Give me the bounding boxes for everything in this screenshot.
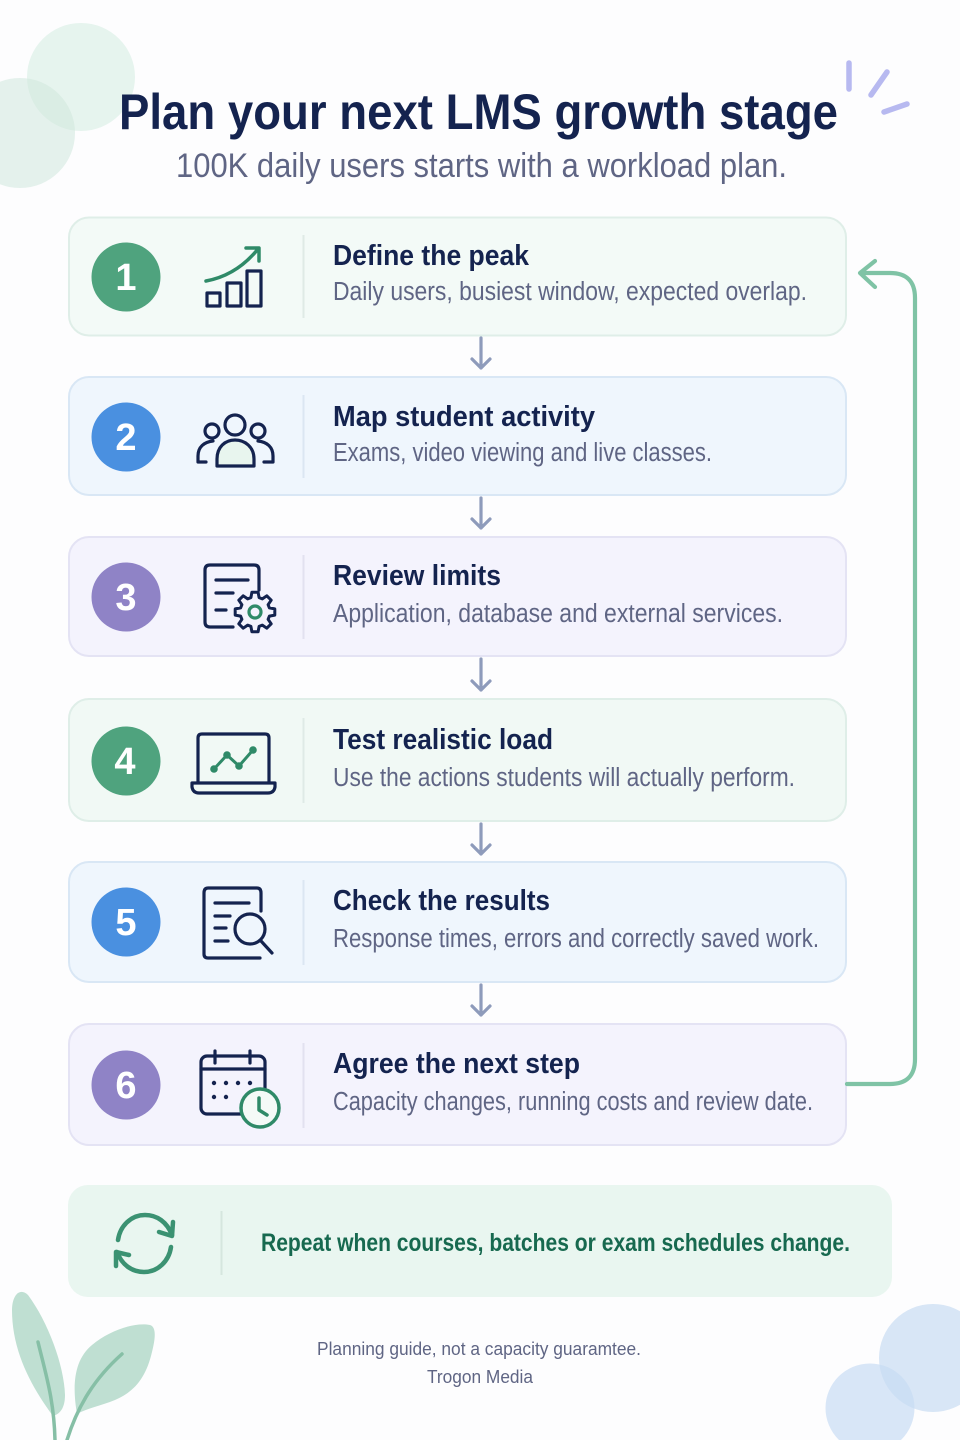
step 6 description: Capacity changes, running costs and review date. <box>333 1088 813 1116</box>
decorative leaves bottom left <box>12 1292 155 1440</box>
decorative sparks top right <box>849 63 907 112</box>
number badge 1: 1 <box>115 257 137 299</box>
panel: repeat banner <box>68 1185 892 1297</box>
panel: step 5 <box>69 862 846 982</box>
arrow 5 to 6 <box>472 985 490 1015</box>
number badge 3: 3 <box>115 577 137 619</box>
panel: step 4 <box>69 699 846 821</box>
footer credit: Trogon Media <box>427 1367 534 1387</box>
panel: step 2 <box>69 377 846 495</box>
panel: step 3 <box>69 537 846 656</box>
icon: calendar with clock <box>201 1051 279 1127</box>
arrow 3 to 4 <box>472 659 490 690</box>
step 1 heading: Define the peak <box>333 240 530 272</box>
arrow 2 to 3 <box>472 498 490 528</box>
panel: step 1 <box>69 218 846 336</box>
icon: document with magnifier <box>204 888 272 958</box>
subtitle: 100K daily users starts with a workload plan. <box>176 147 787 185</box>
number badge 5 <box>92 888 160 956</box>
loop arrow from step 6 back to step 1 <box>847 261 915 1084</box>
icon: refresh <box>116 1215 173 1272</box>
step 3 description: Application, database and external services. <box>333 600 783 628</box>
title: Plan your next LMS growth stage <box>119 84 838 140</box>
footer note: Planning guide, not a capacity guaramtee. <box>317 1339 641 1359</box>
arrow 1 to 2 <box>472 338 490 368</box>
panel: step 6 <box>69 1024 846 1145</box>
number badge 6 <box>92 1050 160 1120</box>
step 3 heading: Review limits <box>333 560 501 592</box>
arrow 4 to 5 <box>472 824 490 854</box>
number badge 6: 6 <box>115 1065 137 1107</box>
step 2 heading: Map student activity <box>333 401 595 433</box>
number badge 5: 5 <box>115 902 137 944</box>
icon: laptop with line chart <box>192 734 275 793</box>
step 4 description: Use the actions students will actually perform. <box>333 764 795 792</box>
number badge 3 <box>92 562 160 632</box>
number badge 2: 2 <box>115 417 137 459</box>
step 2 description: Exams, video viewing and live classes. <box>333 439 712 467</box>
repeat message: Repeat when courses, batches or exam schedules change. <box>261 1229 850 1257</box>
number badge 4: 4 <box>114 741 136 783</box>
icon: growth chart <box>206 248 261 306</box>
step 4 heading: Test realistic load <box>333 724 553 756</box>
step 1 description: Daily users, busiest window, expected overlap. <box>333 278 807 306</box>
step 5 description: Response times, errors and correctly saved work. <box>333 925 819 953</box>
decorative circles top left <box>0 23 135 188</box>
number badge 4 <box>92 726 160 796</box>
step 6 heading: Agree the next step <box>333 1048 580 1080</box>
number badge 1 <box>92 242 160 312</box>
number badge 2 <box>92 402 160 472</box>
step 5 heading: Check the results <box>333 885 550 917</box>
icon: document with gear <box>205 565 275 632</box>
decorative circles bottom right <box>826 1304 960 1440</box>
icon: people <box>198 415 273 466</box>
